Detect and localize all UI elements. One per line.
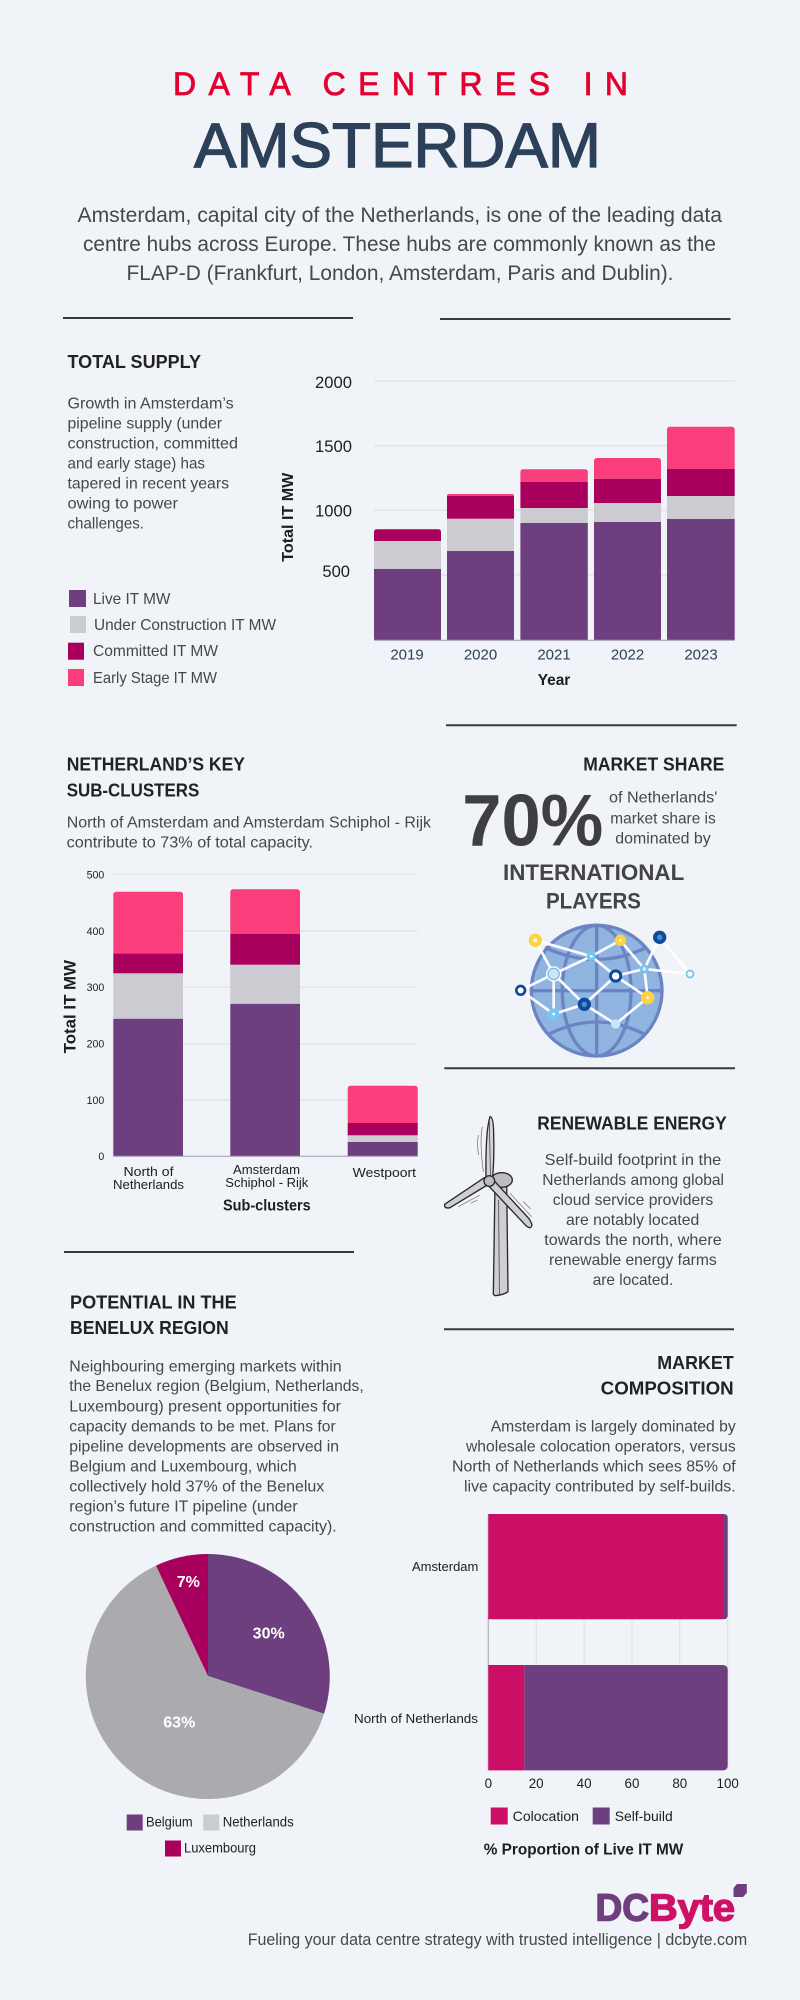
x axis labels: 2022 [611,646,644,663]
bar: Amsterdam [488,1514,728,1619]
y axis labels: 500 [322,562,350,581]
x axis tick labels: 100 [717,1776,739,1791]
x axis labels: Westpoort [353,1165,416,1180]
renewable energy description: are located. [593,1272,673,1289]
heading: Benelux [70,1292,237,1338]
legend: supply stages: Early Stage IT MW [93,670,218,687]
DCByte logo [596,1884,747,1930]
total supply description: owing to power [68,495,179,512]
legend: colocation and self-build: Colocation [513,1808,579,1824]
x axis labels: North of [124,1164,174,1179]
heading: total supply: TOTAL SUPPLY [68,352,201,372]
x axis tick labels: 40 [577,1776,592,1791]
legend: supply stages [68,590,277,687]
renewable energy description: renewable energy farms [549,1252,717,1269]
chart: composition horizontal bars [354,1514,739,1791]
bar: North of Netherlands [488,1665,728,1770]
x axis tick labels: 0 [485,1776,492,1791]
x axis tick labels [485,1776,739,1791]
legend: Benelux countries: Luxembourg [184,1839,256,1855]
bar: North of Netherlands [113,892,183,1156]
y axis labels: 0 [98,1151,104,1163]
bar 2019 [374,529,441,640]
y axis labels: 400 [87,926,104,938]
stat caption: market share is [610,810,716,827]
stat caption: dominated by [615,830,711,847]
Benelux description: capacity demands to be met. Plans for [69,1418,336,1435]
footer [248,1884,747,1949]
x axis labels: 2023 [684,646,718,663]
heading: market composition: MARKET [657,1353,734,1373]
international players label [503,860,685,914]
Benelux description: Neighbouring emerging markets within [69,1358,342,1375]
bar 2020 [447,494,514,640]
y axis labels: 200 [87,1039,104,1051]
category labels: Amsterdam [412,1559,478,1574]
international players label: INTERNATIONAL [503,860,685,885]
icon: wind turbine [445,1117,532,1296]
heading: sub-clusters: SUB-CLUSTERS [67,781,199,801]
x axis labels: 2021 [537,646,571,663]
axis title: proportion: % Proportion of Live IT MW [484,1842,684,1859]
y axis labels: 1000 [315,502,352,521]
header block [78,66,722,285]
title kicker: DATA CENTRES IN [173,66,628,102]
market composition description [452,1418,736,1495]
Benelux description: Luxembourg) present opportunities for [69,1398,342,1416]
renewable energy description: are notably located [566,1212,699,1229]
renewable energy description: towards the north, where [544,1232,722,1249]
y axis labels: 500 [87,869,104,881]
Benelux description: region’s future IT pipeline (under [69,1498,298,1515]
panel: market share [462,755,724,1056]
y axis labels: 2000 [315,373,352,392]
legend: colocation and self-build [491,1808,673,1824]
total supply description: construction, committed [68,435,238,452]
international players label: PLAYERS [546,889,641,914]
chart: sub-cluster stacked bars [60,869,418,1215]
legend: supply stages: Under Construction IT MW [94,617,277,634]
x axis labels [390,646,718,663]
renewable energy description: Self-build footprint in the [545,1152,721,1169]
Benelux description: Belgium and Luxembourg, which [69,1459,297,1476]
category labels: North of Netherlands [354,1711,478,1726]
legend: supply stages: Committed IT MW [93,643,219,660]
total supply description [68,395,238,532]
panel: market composition [354,1353,739,1859]
market composition description: Amsterdam is largely dominated by [491,1418,736,1435]
legend: Benelux countries: Netherlands [223,1813,294,1829]
x axis tick labels: 20 [529,1776,544,1791]
heading: market composition [601,1353,734,1399]
y axis title: Total IT MW [60,959,79,1053]
legend: Benelux countries: Belgium [146,1813,193,1829]
intro paragraph: Amsterdam, capital city of the Netherlands, is one of the leading data [78,204,722,227]
chart: total supply stacked bars [280,373,735,689]
panel: Benelux potential [69,1292,364,1856]
market composition description: wholesale colocation operators, versus [465,1438,736,1455]
intro paragraph [78,204,722,285]
panel: total supply text [68,352,277,687]
market composition description: live capacity contributed by self-builds. [464,1478,736,1495]
DCByte logo: Byte [649,1888,735,1930]
stat caption [609,790,717,847]
legend: Benelux countries [127,1813,294,1856]
bar 2021 [520,469,588,640]
sub-clusters description: contribute to 73% of total capacity. [67,834,313,851]
x axis title: Year [538,672,570,689]
sub-clusters description [67,814,432,851]
bar 2023 [667,427,735,640]
heading: sub-clusters [67,755,245,801]
legend: supply stages: Live IT MW [93,591,171,608]
bar 2022 [594,458,661,640]
pie value labels: 7% [177,1574,200,1591]
stat caption: of Netherlands' [609,790,717,807]
Benelux description: pipeline developments are observed in [69,1438,339,1455]
pie value labels: 63% [163,1715,195,1732]
x axis labels: Netherlands [113,1177,184,1192]
x axis tick labels: 60 [625,1776,639,1791]
total supply description: pipeline supply (under [68,415,223,432]
heading: Benelux: BENELUX REGION [70,1318,229,1338]
DCByte logo: DC [596,1888,649,1930]
heading: market share: MARKET SHARE [583,755,724,775]
intro paragraph: FLAP-D (Frankfurt, London, Amsterdam, Paris and Dublin). [126,262,674,285]
heading: Benelux: POTENTIAL IN THE [70,1292,237,1312]
x axis labels: 2020 [464,646,497,663]
y axis labels [315,373,352,581]
market composition description: North of Netherlands which sees 85% of [452,1458,736,1475]
sub-clusters description: North of Amsterdam and Amsterdam Schiphol - Rijk [67,814,432,831]
renewable energy description [542,1152,724,1289]
Benelux description [69,1358,364,1535]
x axis labels: Schiphol - Rijk [225,1175,309,1190]
y axis labels [87,869,104,1163]
x axis labels [113,1162,416,1192]
bar: Westpoort [348,1086,418,1156]
x axis tick labels: 80 [672,1776,687,1791]
Benelux description: collectively hold 37% of the Benelux [69,1478,324,1496]
pie value labels: 30% [253,1625,285,1642]
bar: Amsterdam Schiphol - Rijk [230,889,300,1156]
panel: renewable energy [445,1113,727,1296]
heading: renewable energy: RENEWABLE ENERGY [537,1113,727,1133]
main title: AMSTERDAM [194,111,601,181]
Benelux description: the Benelux region (Belgium, Netherlands, [69,1378,364,1395]
category labels [354,1559,478,1726]
icon: globe network [515,925,694,1056]
y axis title: Total IT MW [280,472,297,562]
big stat: 70%: 70% [462,781,603,862]
intro paragraph: centre hubs across Europe. These hubs are commonly known as the [83,233,716,256]
x axis title: Sub-clusters [223,1198,311,1215]
chart: Benelux pie [86,1554,330,1799]
y axis labels: 300 [87,982,104,994]
legend: colocation and self-build: Self-build [615,1808,673,1824]
y axis labels: 100 [87,1095,104,1107]
total supply description: challenges. [68,515,144,532]
total supply description: tapered in recent years [68,475,229,492]
footer tagline: Fueling your data centre strategy with trusted intelligence | dcbyte.com [248,1931,747,1949]
y axis labels: 1500 [315,437,352,456]
Benelux description: construction and committed capacity). [69,1518,337,1535]
total supply description: and early stage) has [68,455,205,472]
pie value labels [163,1574,285,1732]
renewable energy description: cloud service providers [553,1192,713,1209]
x axis labels: 2019 [390,646,424,663]
total supply description: Growth in Amsterdam’s [68,395,234,412]
heading: market composition: COMPOSITION [601,1379,734,1399]
heading: sub-clusters: NETHERLAND’S KEY [67,755,245,775]
x axis labels: Amsterdam [233,1162,300,1177]
renewable energy description: Netherlands among global [542,1172,724,1189]
panel: key sub-clusters [60,755,432,1215]
